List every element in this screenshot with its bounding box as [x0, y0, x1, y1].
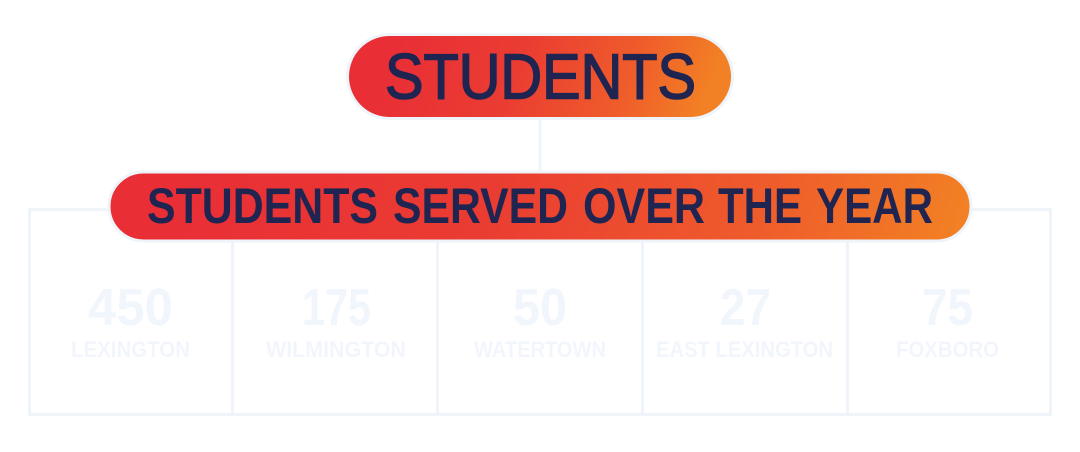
- stat: East Lexington: [656, 279, 833, 362]
- stat: Wilmington: 175: [302, 279, 371, 337]
- title pill: Students: STUDENTS: [385, 40, 696, 112]
- stat: Watertown: [474, 279, 606, 362]
- stat: Watertown: WATERTOWN: [474, 337, 606, 362]
- subtitle pill: Students served over the year: THE: [718, 178, 802, 234]
- panel: location boxes: [30, 208, 1050, 415]
- subtitle pill: Students served over the year: [109, 172, 971, 241]
- subtitle pill: Students served over the year: STUDENTS: [147, 178, 378, 234]
- stat: East Lexington: 27: [720, 279, 771, 337]
- subtitle pill: Students served over the year: SERVED: [393, 178, 568, 234]
- subtitle pill: Students served over the year: OVER: [583, 178, 705, 234]
- stat: Watertown: 50: [513, 279, 567, 337]
- stat: Wilmington: [266, 279, 406, 362]
- stat: Foxboro: 75: [922, 279, 973, 337]
- stat: Wilmington: WILMINGTON: [266, 337, 406, 362]
- connector line: [538, 118, 542, 172]
- stat: Foxboro: FOXBORO: [896, 337, 999, 362]
- subtitle pill: Students served over the year: YEAR: [816, 178, 933, 234]
- stat: Foxboro: [896, 279, 999, 362]
- stat: Lexington: LEXINGTON: [71, 337, 190, 362]
- stat: Lexington: [71, 279, 190, 362]
- stat: Lexington: 450: [88, 279, 173, 337]
- stat: East Lexington: EAST LEXINGTON: [656, 337, 833, 362]
